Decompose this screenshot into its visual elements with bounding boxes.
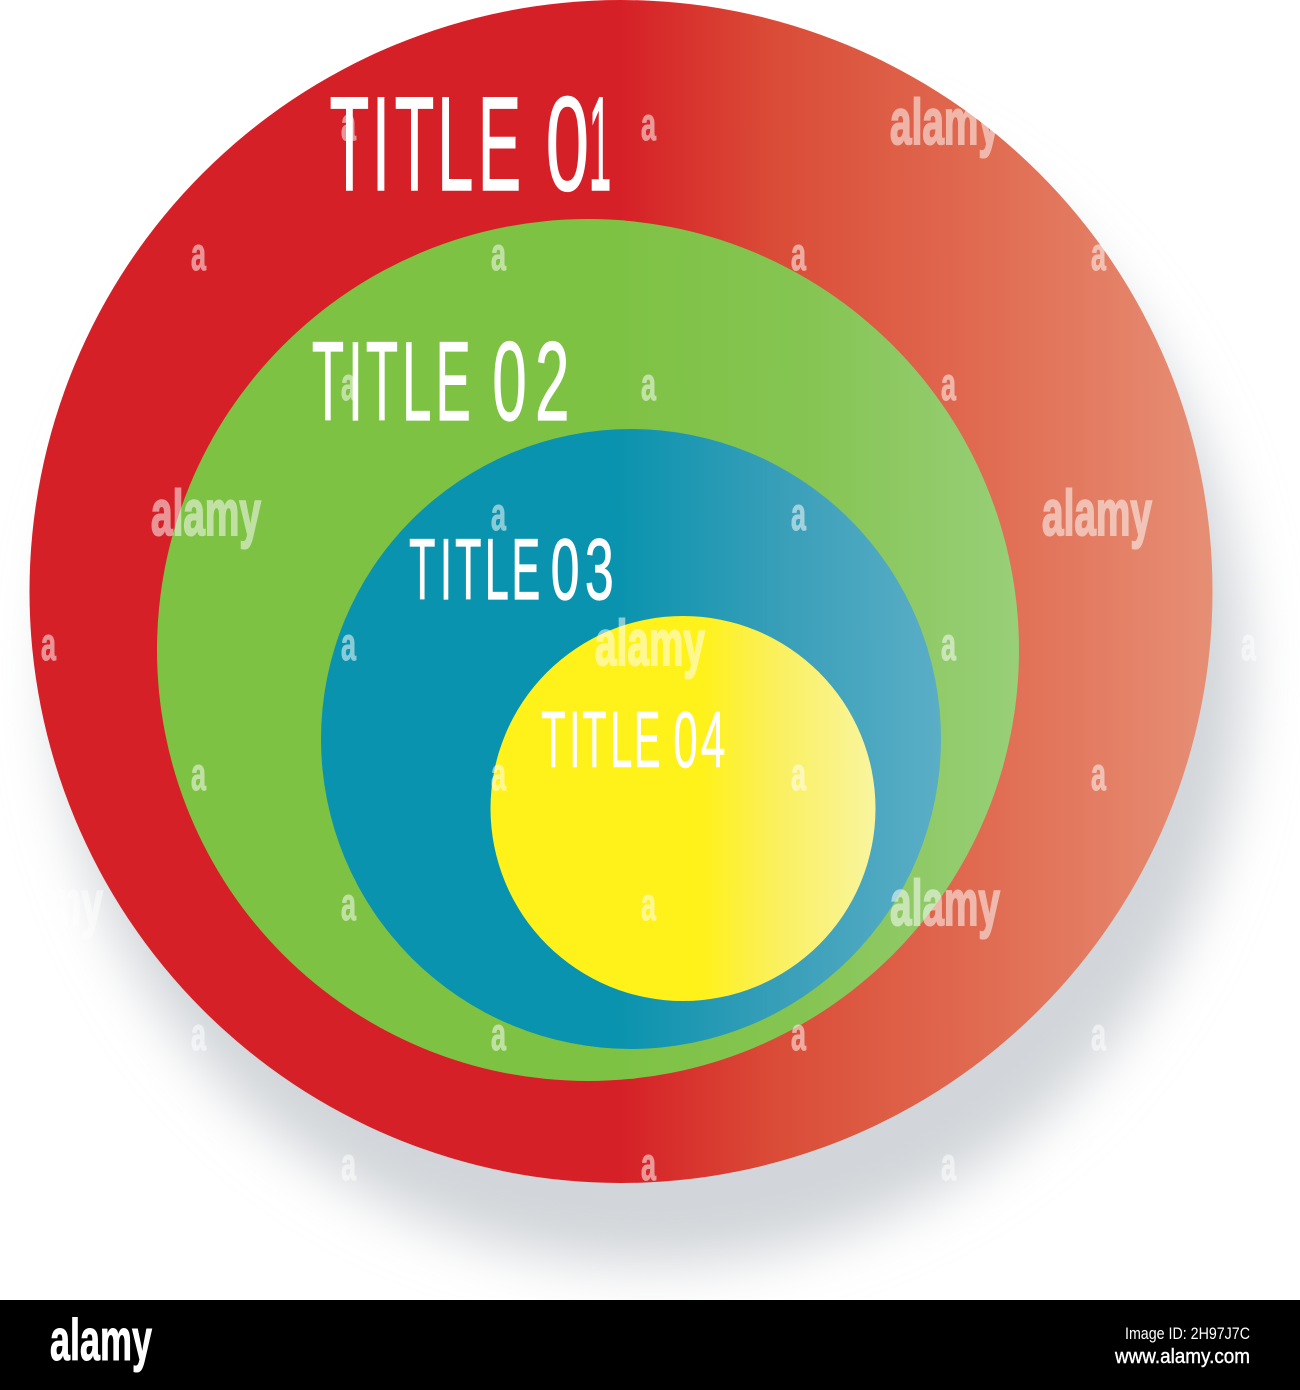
heading: title 01: TITLE (330, 70, 521, 219)
heading: title 03 (409, 522, 614, 618)
watermark: repeated stock marks: a (341, 98, 356, 150)
watermark: repeated stock marks: alamy (1042, 477, 1152, 549)
heading: title 03: TITLE (409, 522, 540, 618)
drop shadow (55, 75, 1245, 1265)
watermark: repeated stock marks: a (191, 748, 206, 800)
watermark: repeated stock marks: a (791, 488, 806, 540)
watermark: repeated stock marks: a (491, 748, 506, 800)
panel: green circle (157, 219, 1019, 1081)
watermark: repeated stock marks: a (491, 228, 506, 280)
watermark: repeated stock marks: a (341, 878, 356, 930)
watermark: repeated stock marks: a (641, 1138, 656, 1190)
panel: blue circle (321, 429, 941, 1049)
footer bar (0, 1300, 1300, 1390)
watermark: repeated stock marks: alamy (890, 86, 1000, 158)
footer logo: alamy (50, 1308, 152, 1373)
watermark: repeated stock marks: a (191, 228, 206, 280)
heading: title 04 (541, 695, 725, 785)
watermark: repeated stock marks: a (641, 358, 656, 410)
heading: title 02: TITLE (312, 319, 471, 444)
watermark: repeated stock marks: a (941, 1138, 956, 1190)
heading: title 01: 1 (589, 68, 611, 218)
heading: title 04: 04 (673, 695, 725, 784)
watermark: repeated stock marks: a (641, 98, 656, 150)
heading: title 02 (312, 319, 569, 445)
heading: title 01 (330, 68, 611, 219)
watermark: repeated stock marks: a (191, 1008, 206, 1060)
watermark: repeated stock marks: alamy (595, 607, 705, 679)
watermark: repeated stock marks: a (1241, 618, 1256, 670)
watermark: repeated stock marks: a (491, 488, 506, 540)
watermark: repeated stock marks: a (641, 878, 656, 930)
watermark: repeated stock marks: a (791, 228, 806, 280)
watermark: repeated stock marks: a (41, 618, 56, 670)
watermark: repeated stock marks (0, 86, 1256, 1190)
watermark: repeated stock marks: a (341, 618, 356, 670)
watermark: repeated stock marks: alamy (890, 867, 1000, 939)
panel: yellow circle (490, 616, 876, 1001)
watermark: repeated stock marks: a (341, 1138, 356, 1190)
watermark: repeated stock marks: a (341, 358, 356, 410)
watermark: repeated stock marks: a (1091, 228, 1106, 280)
footer image id: Image ID: 2H97J7C (1125, 1324, 1250, 1343)
watermark: repeated stock marks: a (941, 358, 956, 410)
heading: title 03: 03 (551, 523, 614, 618)
panel: outer red circle (30, 0, 1212, 1183)
watermark: repeated stock marks: a (491, 1008, 506, 1060)
watermark: repeated stock marks: a (791, 1008, 806, 1060)
watermark: repeated stock marks: a (1091, 748, 1106, 800)
heading: title 04: TITLE (541, 696, 660, 785)
footer url: www.alamy.com (1114, 1346, 1250, 1368)
watermark: repeated stock marks: a (941, 618, 956, 670)
heading: title 01: 0 (546, 70, 589, 219)
heading: title 02: 02 (492, 320, 569, 445)
watermark: repeated stock marks: alamy (151, 477, 261, 549)
watermark: repeated stock marks: a (1091, 1008, 1106, 1060)
watermark: repeated stock marks: a (791, 748, 806, 800)
